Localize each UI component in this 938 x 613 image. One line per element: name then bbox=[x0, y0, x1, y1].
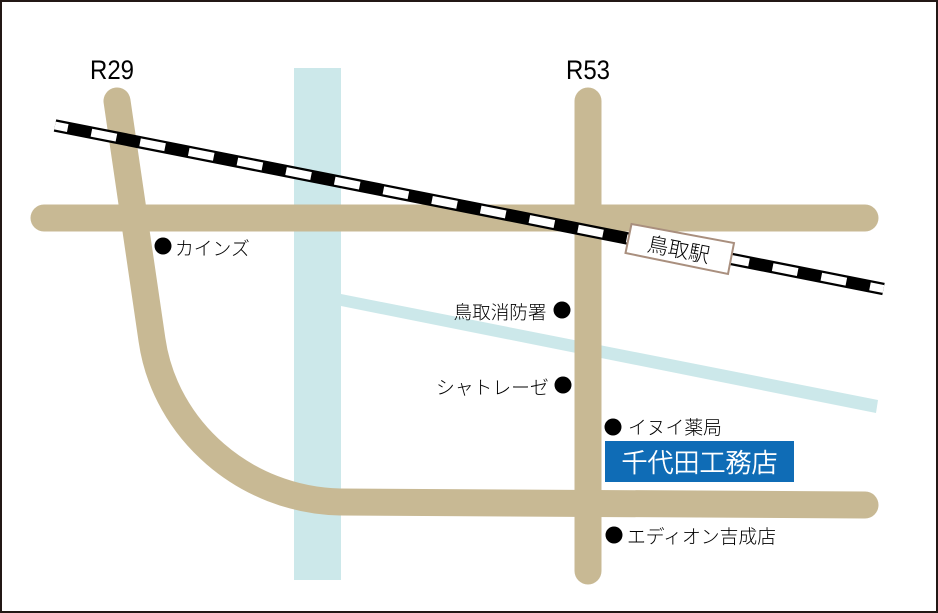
road label: R29: R29 bbox=[90, 55, 134, 85]
station label: 鳥取駅: 鳥取駅 bbox=[645, 233, 712, 268]
river: vertical bbox=[294, 68, 341, 580]
station label: 鳥取駅 bbox=[626, 224, 734, 274]
road: horizontal upper bbox=[44, 204, 865, 232]
railway bbox=[55, 126, 884, 289]
road label: R53: R53 bbox=[566, 55, 610, 85]
landmark: エディオン吉成店: エディオン吉成店 bbox=[627, 526, 776, 547]
road: R29 curving into lower road bbox=[117, 101, 865, 505]
river: diagonal branch bbox=[341, 294, 878, 413]
destination label: 千代田工務店 bbox=[605, 441, 794, 482]
landmark: シャトレーゼ: シャトレーゼ bbox=[436, 377, 549, 398]
destination label: 千代田工務店: 千代田工務店 bbox=[621, 448, 778, 478]
landmark: イヌイ薬局: イヌイ薬局 bbox=[628, 417, 722, 438]
road: R53 vertical bbox=[574, 101, 602, 571]
landmark: カインズ: カインズ bbox=[175, 238, 250, 259]
landmark: 鳥取消防署: 鳥取消防署 bbox=[454, 302, 546, 323]
